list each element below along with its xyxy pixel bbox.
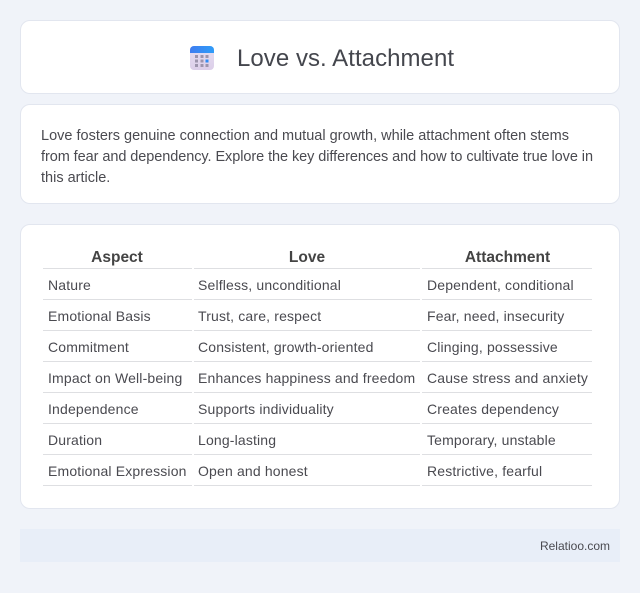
row: Duration <box>48 432 556 448</box>
row: Impact on Well-being: Cause stress and anxiety <box>427 370 588 386</box>
row: Independence <box>48 401 559 417</box>
row: Commitment: Consistent, growth-oriented <box>198 339 374 355</box>
row: Commitment <box>48 339 558 355</box>
row: Emotional Basis: Trust, care, respect <box>198 308 321 324</box>
row: Impact on Well-being: Impact on Well-being <box>48 370 182 386</box>
row: Emotional Expression: Emotional Expression <box>48 463 187 479</box>
row: Commitment: Commitment <box>48 339 129 355</box>
table card <box>20 224 620 509</box>
icon: calendar <box>190 46 214 70</box>
intro text <box>41 128 593 186</box>
column headers <box>91 249 550 266</box>
row: Independence: Independence <box>48 401 139 417</box>
row: Emotional Expression: Restrictive, fearful <box>427 463 542 479</box>
row: Independence: Supports individuality <box>198 401 334 417</box>
footer text: Relatioo.com <box>540 539 610 553</box>
row: Emotional Basis: Emotional Basis <box>48 308 151 324</box>
intro text: Love fosters genuine connection and mutual growth, while attachment often stems <box>41 128 569 144</box>
title: Love vs. Attachment <box>237 45 454 72</box>
comparison table <box>43 249 592 486</box>
row: Emotional Expression <box>48 463 542 479</box>
row: Nature: Dependent, conditional <box>427 277 574 293</box>
row: Nature: Nature <box>48 277 91 293</box>
row: Emotional Expression: Open and honest <box>198 463 308 479</box>
row: Impact on Well-being <box>48 370 588 386</box>
row: Duration: Long-lasting <box>198 432 276 448</box>
row: Independence: Creates dependency <box>427 401 559 417</box>
row: Impact on Well-being: Enhances happiness and freedom <box>198 370 415 386</box>
column headers: Aspect <box>91 249 143 266</box>
column headers: Attachment <box>465 249 550 266</box>
column headers: Love <box>289 249 325 266</box>
row: Duration: Duration <box>48 432 102 448</box>
title card <box>20 20 620 94</box>
row: Nature: Selfless, unconditional <box>198 277 341 293</box>
row: Nature <box>48 277 574 293</box>
intro card <box>20 104 620 204</box>
row: Emotional Basis <box>48 308 564 324</box>
row: Commitment: Clinging, possessive <box>427 339 558 355</box>
intro text: this article. <box>41 170 110 186</box>
row: Duration: Temporary, unstable <box>427 432 556 448</box>
footer bar <box>20 529 620 562</box>
intro text: from fear and dependency. Explore the key differences and how to cultivate true love in <box>41 149 593 165</box>
row: Emotional Basis: Fear, need, insecurity <box>427 308 564 324</box>
